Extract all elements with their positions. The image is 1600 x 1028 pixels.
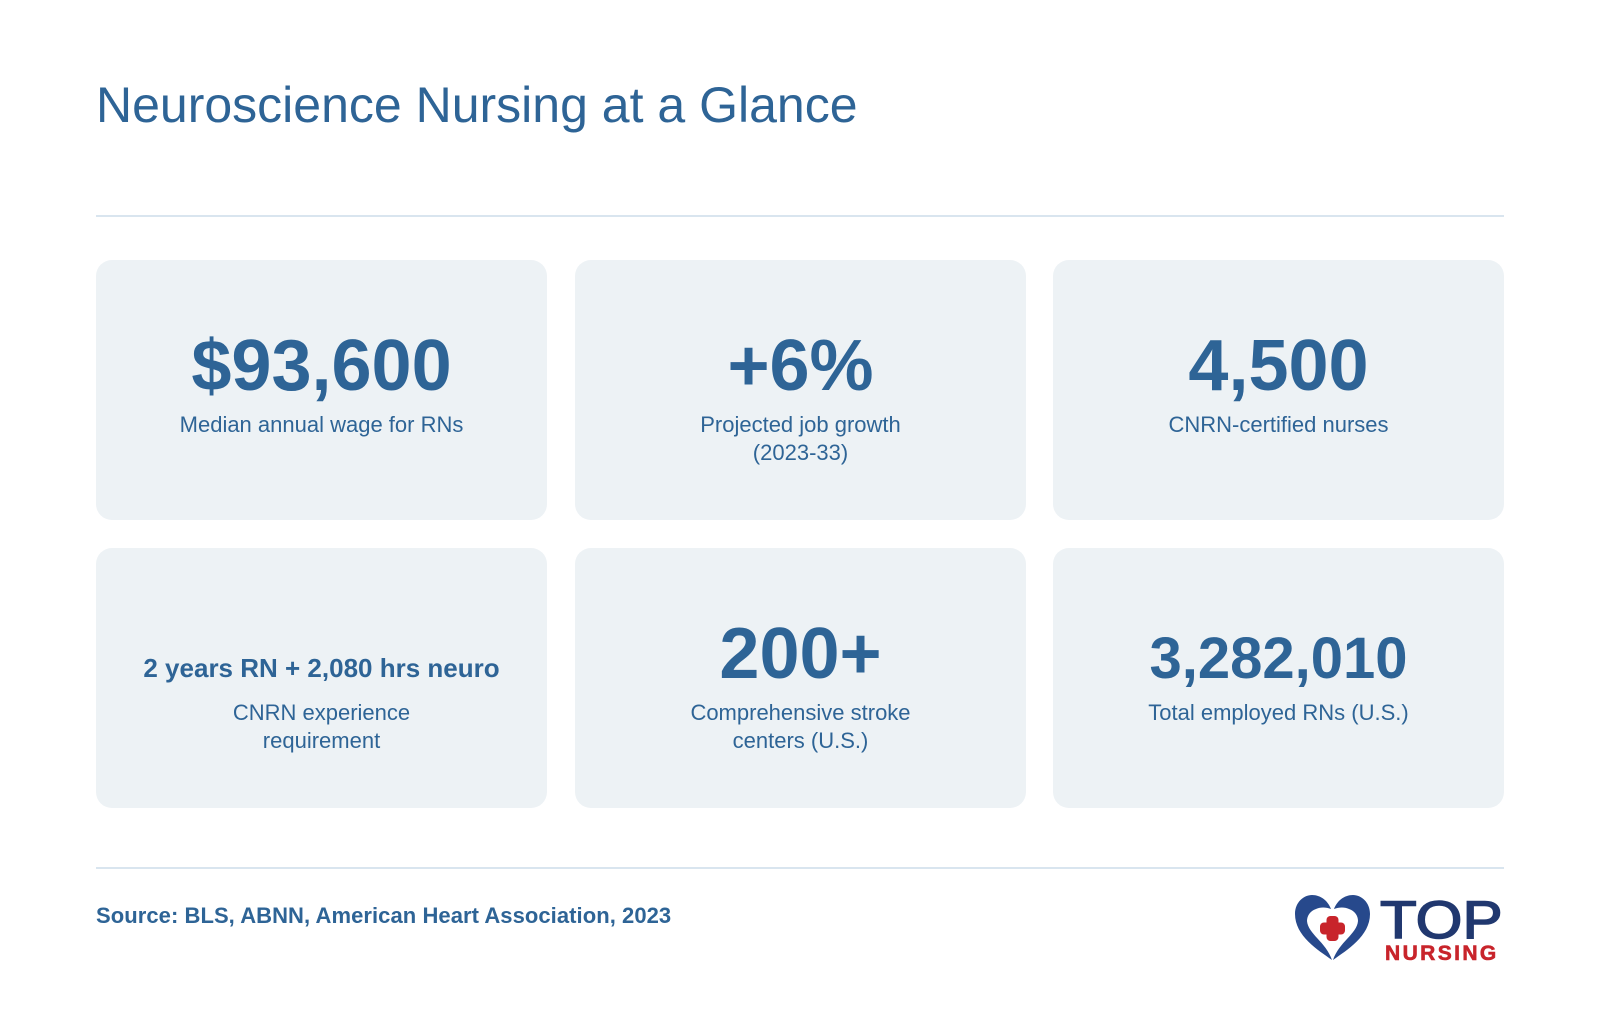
title: Neuroscience Nursing at a Glance xyxy=(96,77,858,133)
panel: employed RNs xyxy=(1053,548,1504,808)
label: stroke centers: Comprehensive stroke xyxy=(690,700,911,725)
label: wage: Median annual wage for RNs xyxy=(180,412,463,437)
icon: heart with cross xyxy=(1295,895,1370,960)
stat: growth: +6% xyxy=(727,326,874,406)
label: experience xyxy=(233,700,410,753)
label: stroke centers: centers (U.S.) xyxy=(733,728,868,753)
source: Source: BLS, ABNN, American Heart Association, 2023 xyxy=(96,903,671,928)
label: experience: CNRN experience xyxy=(233,700,410,725)
panel: median wage xyxy=(96,260,547,520)
logo xyxy=(1295,891,1503,965)
logo word: NURSING: NURSING xyxy=(1385,942,1499,965)
label: experience: requirement xyxy=(263,728,380,753)
label: stroke centers xyxy=(690,700,911,753)
label: growth: Projected job growth xyxy=(700,412,901,437)
panel: certified nurses xyxy=(1053,260,1504,520)
logo word: TOP: TOP xyxy=(1380,891,1503,950)
stat: employed: 3,282,010 xyxy=(1149,626,1408,691)
panel: stroke centers xyxy=(575,548,1026,808)
label: certified: CNRN-certified nurses xyxy=(1168,412,1389,437)
stat: experience: 2 years RN + 2,080 hrs neuro xyxy=(143,653,500,683)
stat: wage: $93,600 xyxy=(191,326,452,406)
label: growth xyxy=(700,412,901,465)
stat: stroke centers: 200+ xyxy=(719,614,882,694)
stat: certified: 4,500 xyxy=(1188,326,1369,406)
label: growth: (2023-33) xyxy=(753,440,848,465)
panel: job growth xyxy=(575,260,1026,520)
panel: experience requirement xyxy=(96,548,547,808)
label: employed: Total employed RNs (U.S.) xyxy=(1148,700,1409,725)
